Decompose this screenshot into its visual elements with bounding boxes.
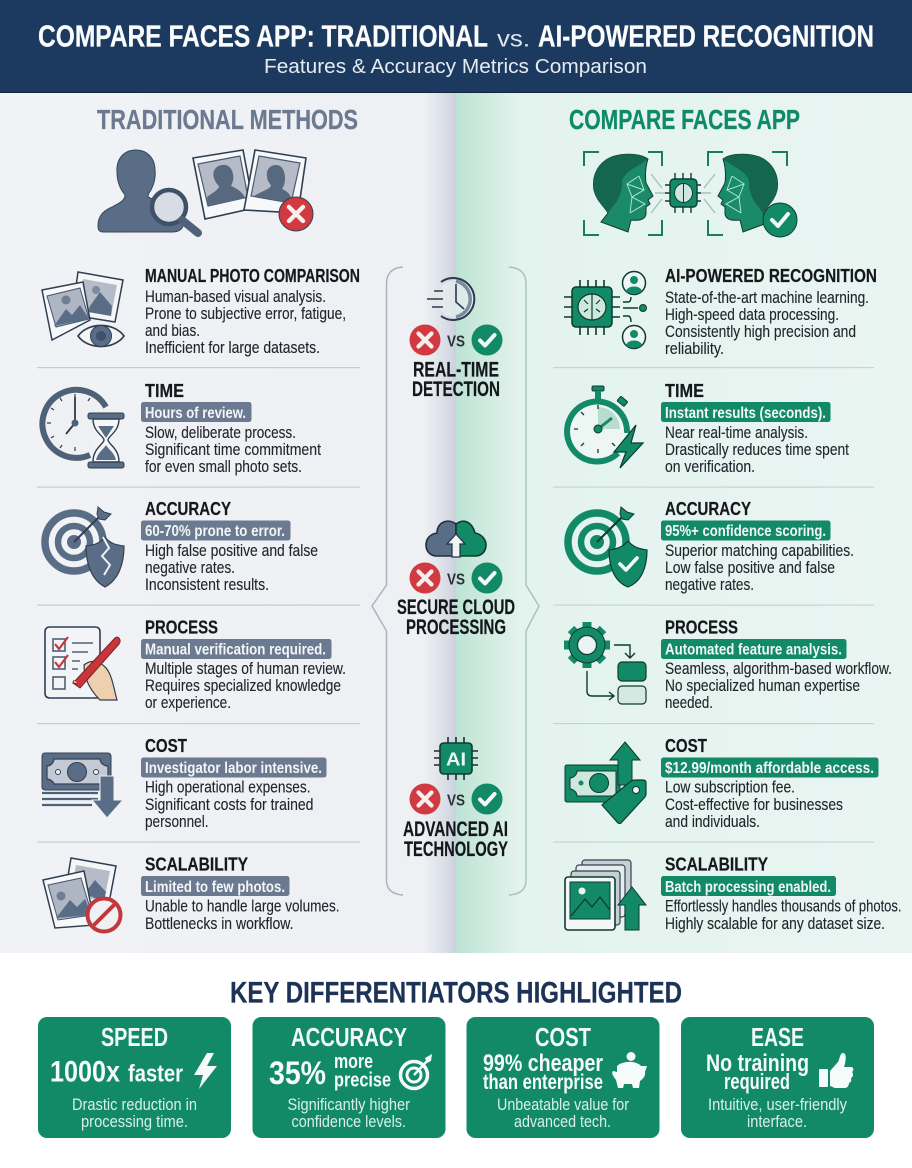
icon: lightning bolt [194,1053,217,1089]
icon: cross [410,562,440,594]
description: Prone to subjective error, fatigue, [145,304,346,323]
heading: PROCESS [145,616,218,638]
card: accuracy: Significantly higher [288,1095,410,1114]
card: accuracy [252,1017,446,1138]
icon: clock and hourglass [42,390,124,468]
highlight pill: Investigator labor intensive. [145,760,322,777]
card: cost [466,1017,660,1138]
description: for even small photo sets. [145,457,302,476]
icon: photos with prohibition sign [43,858,120,932]
label: vs: VS [447,572,465,588]
icon: thumbs up [819,1053,853,1088]
card: ease: EASE [751,1024,804,1052]
description: Low subscription fee. [665,778,795,796]
heading: SCALABILITY [145,854,248,874]
row: cost [565,735,878,831]
icon: piggy bank [612,1052,647,1088]
card: cost: advanced tech. [514,1112,611,1131]
icon: cross [410,784,440,814]
highlight pill: Automated feature analysis. [665,642,842,658]
card: speed: SPEED [101,1024,168,1052]
icon: target and check shield [568,507,647,587]
heading: MANUAL PHOTO COMPARISON [145,265,360,286]
description: Cost-effective for businesses [665,795,843,814]
row: time [42,380,321,476]
card: speed: Drastic reduction in [72,1095,197,1114]
icon: fast clock [427,278,475,320]
card: ease [681,1017,874,1138]
label [403,818,508,861]
item: secure cloud processing [397,521,515,639]
icon: check [472,562,502,594]
description: Superior matching capabilities. [665,541,854,560]
card: accuracy: confidence levels. [292,1112,406,1131]
card: speed: processing time. [81,1112,188,1131]
label [397,596,515,639]
description: Inefficient for large datasets. [145,338,320,357]
description: Consistently high precision and [665,322,856,341]
icon: photo stack and up arrow [565,860,646,930]
description: negative rates. [145,558,235,577]
title [38,18,874,54]
description: on verification. [665,457,755,476]
card: speed: faster [128,1060,183,1088]
row: ai-powered recognition [564,265,877,358]
card: ease: No training [706,1050,809,1077]
card: accuracy: more [334,1051,373,1073]
description: negative rates. [665,575,754,594]
icon: AI chip: AI [446,750,466,770]
description: Low false positive and false [665,558,835,577]
icon: cross [410,324,440,356]
card: cost: than enterprise [483,1071,603,1094]
row: process [45,616,346,712]
description: High operational expenses. [145,778,310,796]
card: cost: 99% cheaper [483,1050,603,1077]
highlight pill: Batch processing enabled. [665,879,831,896]
icon: check [472,324,502,356]
highlight pill: $12.99/month affordable access. [665,760,874,777]
description: Unable to handle large volumes. [145,896,340,916]
card: accuracy: 35% [269,1055,326,1091]
description: or experience. [145,693,231,712]
highlight pill: Limited to few photos. [145,879,285,896]
icon: banknotes and down arrow [42,753,123,818]
heading: traditional methods: TRADITIONAL METHODS [97,104,358,135]
label [412,358,500,401]
icon: stopwatch with bolt [567,386,643,468]
description [665,896,902,933]
icon: gear and workflow [564,622,646,704]
section heading: key differentiators: KEY DIFFERENTIATORS HIGHLIGHTED [230,976,682,1010]
heading: TIME [665,380,704,401]
header banner [0,0,912,93]
card: speed: 1000x [50,1056,120,1088]
label: ADVANCED AI [403,818,508,841]
icon: check [472,784,502,814]
description [665,288,869,358]
icon: person, magnifier and rejected photos [98,150,313,233]
description: Requires specialized knowledge [145,676,341,695]
description [145,287,346,357]
highlight pill: 95%+ confidence scoring. [665,523,826,540]
description [665,778,843,831]
highlight pill: Instant results (seconds). [665,405,826,422]
card: ease: Intuitive, user-friendly [708,1095,848,1114]
row: scalability [565,854,902,933]
panel: center comparison bracket [372,267,539,895]
icon: target and cracked shield [45,507,124,587]
description: High-speed data processing. [665,305,839,324]
label: DETECTION [412,378,500,401]
heading: ACCURACY [665,498,751,519]
card: cost: Unbeatable value for [497,1095,629,1114]
heading: COST [145,735,187,756]
description [145,423,321,476]
icon: photos and eye [42,272,124,346]
description: Multiple stages of human review. [145,659,346,678]
description [145,896,340,933]
highlight pill: Manual verification required. [145,642,326,658]
label: TECHNOLOGY [404,838,508,861]
label: vs: VS [447,792,465,810]
label: REAL-TIME [413,358,499,382]
row: process [564,616,892,712]
row: accuracy [568,498,854,594]
title: vs. [497,26,530,52]
description: Significant time commitment [145,440,321,459]
description [665,541,854,594]
heading: compare faces app: COMPARE FACES APP [569,104,800,135]
description: Slow, deliberate process. [145,423,296,442]
label: PROCESSING [406,616,506,639]
card: accuracy: ACCURACY [291,1024,407,1052]
row: manual photo comparison [42,265,360,357]
card: speed [38,1017,231,1138]
label: SECURE CLOUD [397,596,515,619]
row: scalability [43,854,340,933]
heading: SCALABILITY [665,854,768,874]
description: Bottlenecks in workflow. [145,914,294,933]
page background: right panel [456,93,912,953]
icon: brain chip and users [564,272,646,348]
heading: ACCURACY [145,498,231,519]
icon: checklist and hand with pen [45,627,120,700]
card: cost: COST [535,1024,591,1052]
icon: cloud upload [426,521,486,557]
description: Inconsistent results. [145,575,269,594]
icon: AI face matching [584,152,797,237]
description [145,778,314,831]
item: real-time detection [410,278,502,401]
description [665,659,892,712]
description: High false positive and false [145,541,318,560]
description: personnel. [145,812,208,831]
description: No specialized human expertise [665,676,860,695]
description [145,541,318,594]
heading: TIME [145,380,184,401]
highlight pill: Hours of review. [145,405,246,422]
row: time [567,380,849,476]
page background: left panel [0,93,456,953]
description: Near real-time analysis. [665,423,808,442]
heading: COST [665,735,707,756]
card: ease: required [724,1069,790,1094]
icon: target [400,1054,432,1088]
description [145,659,346,712]
description: Drastically reduces time spent [665,440,849,459]
row: accuracy [45,498,318,594]
description: and bias. [145,321,200,340]
description: needed. [665,693,713,712]
heading: PROCESS [665,616,738,638]
description: and individuals. [665,812,760,831]
highlight pill: 60-70% prone to error. [145,523,285,540]
description: reliability. [665,339,724,358]
panel: traditional method rows [37,265,360,933]
card: accuracy: precise [334,1070,391,1092]
subtitle: Features & Accuracy Metrics Comparison [264,55,647,78]
row: cost [42,735,326,831]
description [665,423,849,476]
icon: banknote, up arrow and price tag [565,742,646,824]
description: Human-based visual analysis. [145,287,326,306]
description: Significant costs for trained [145,795,314,814]
item: advanced ai technology [403,737,508,861]
panel: compare faces app rows [553,265,902,933]
description: State-of-the-art machine learning. [665,288,869,307]
title: COMPARE FACES APP: TRADITIONAL [38,18,488,54]
label: vs: VS [447,334,465,350]
card: ease: interface. [747,1112,807,1131]
